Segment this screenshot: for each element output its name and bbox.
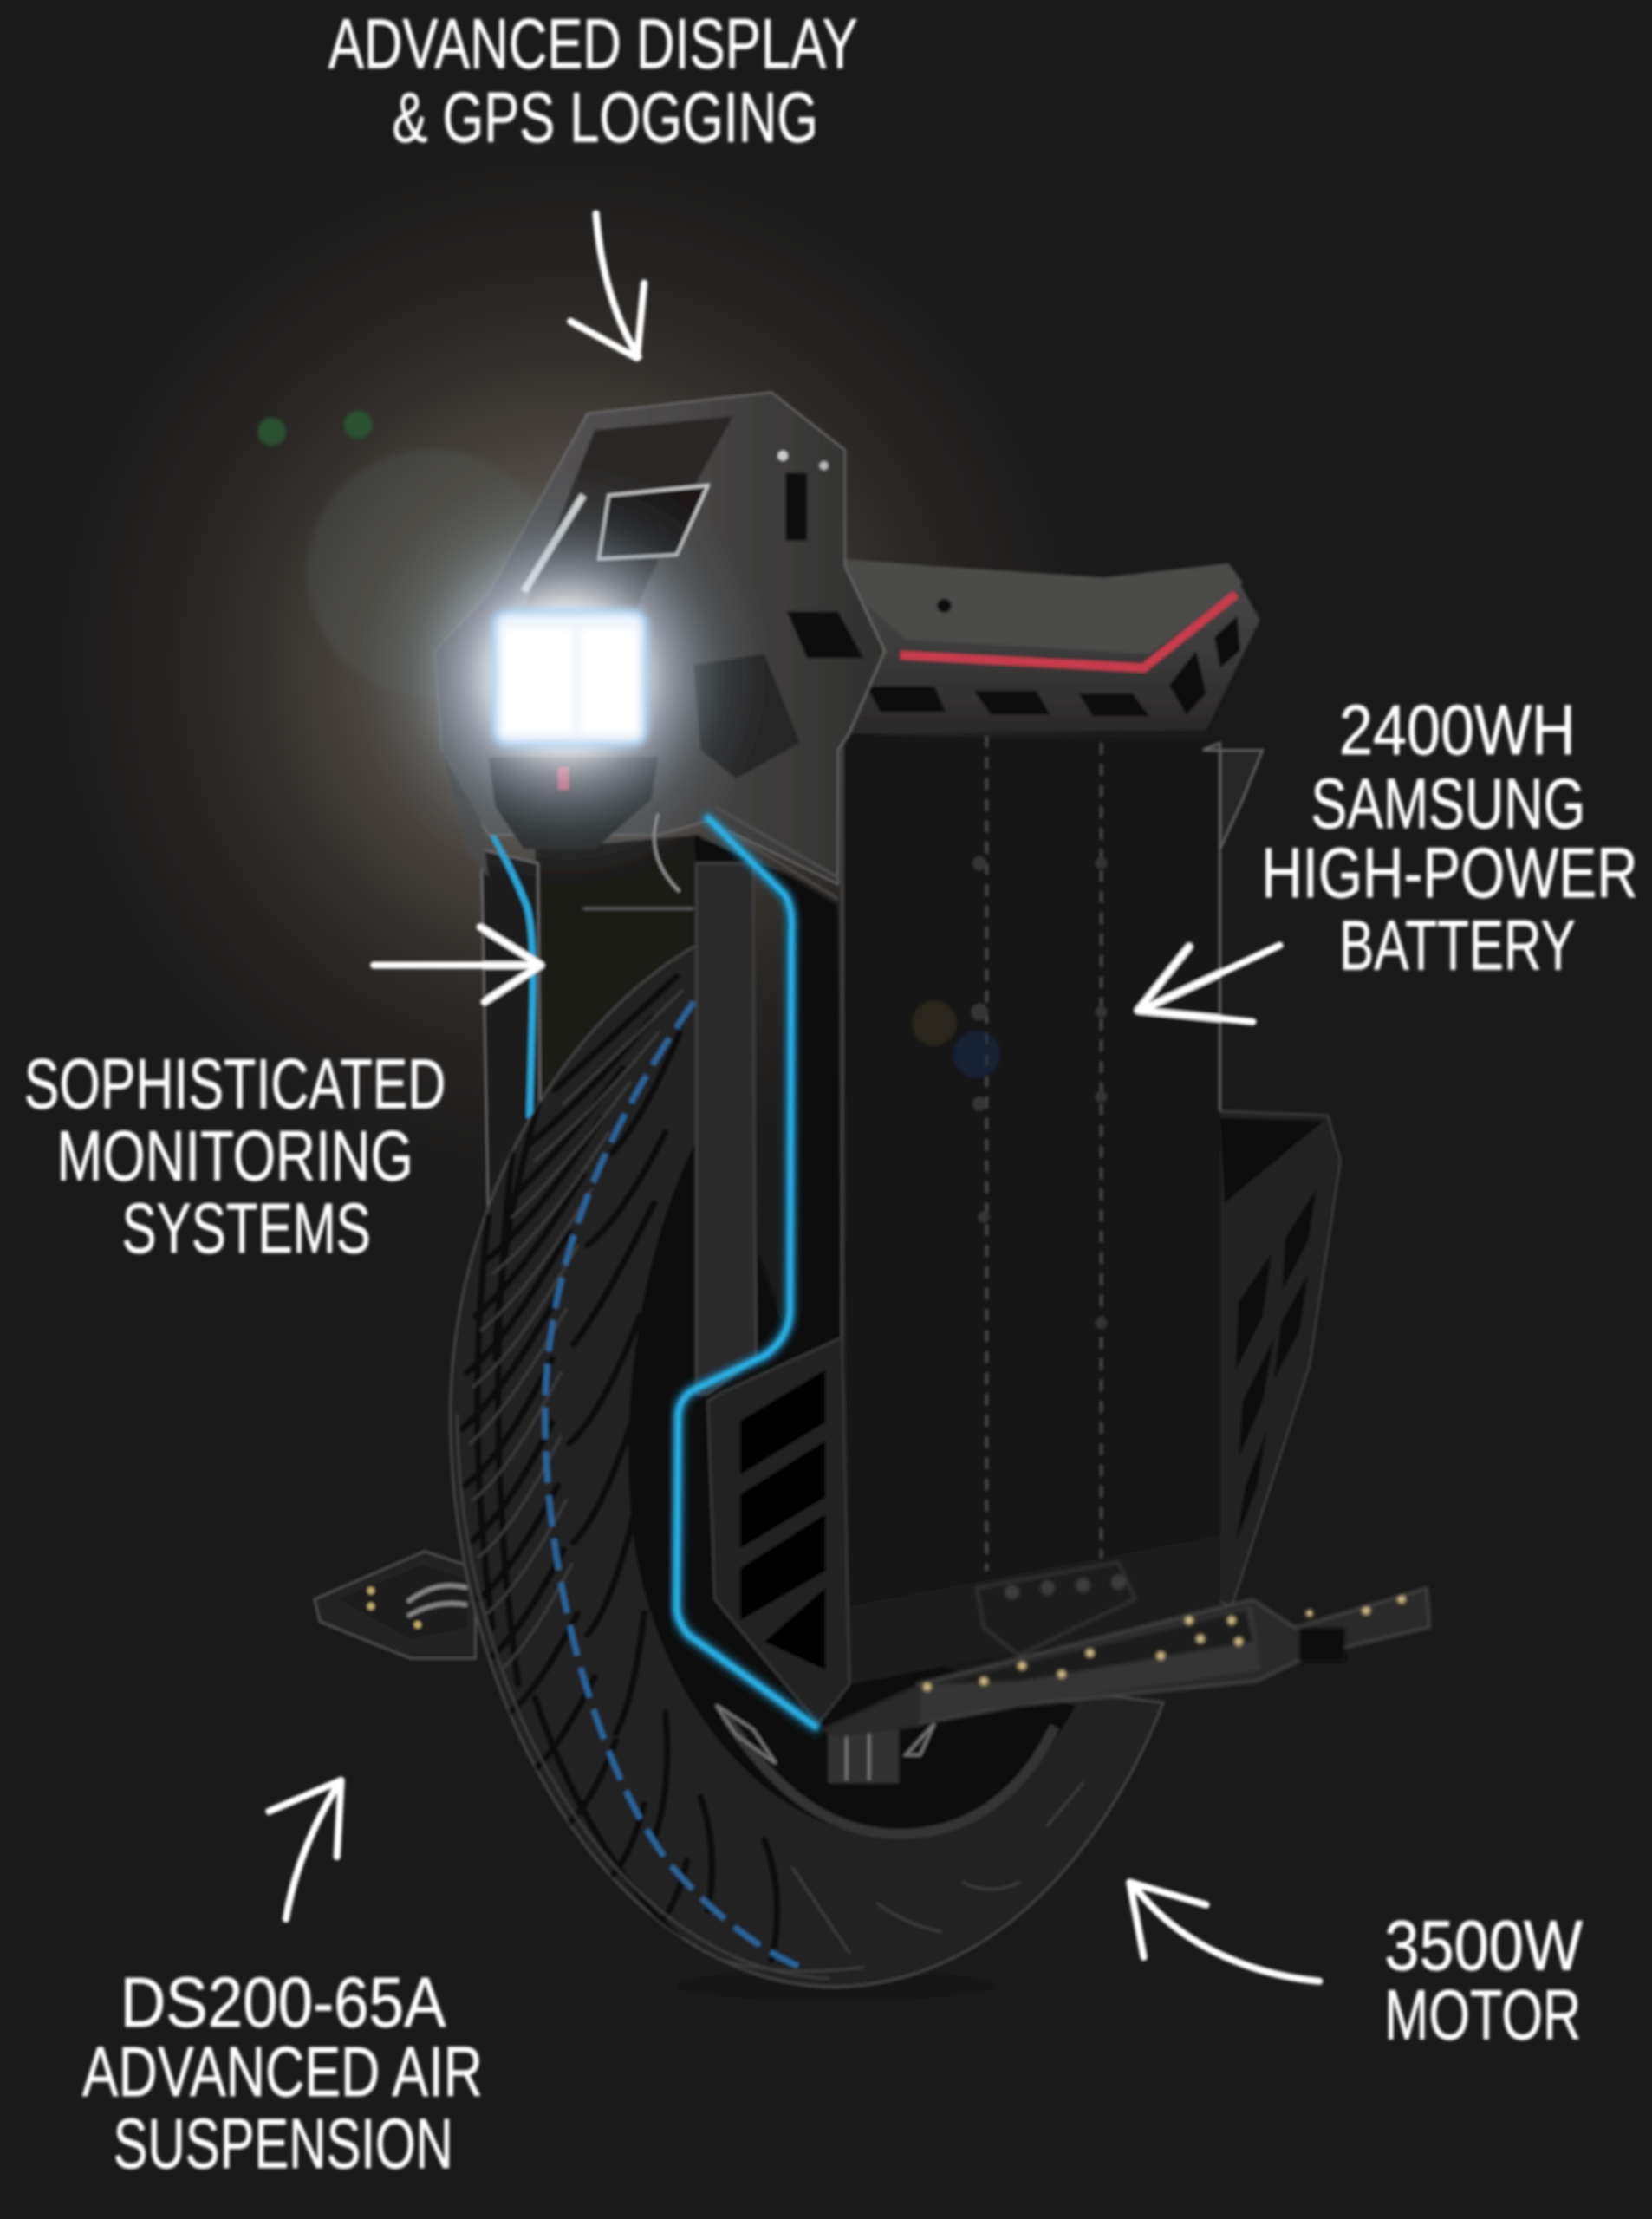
left pedal — [315, 1551, 476, 1658]
callout: battery: 2400WH — [1339, 691, 1576, 770]
faint teal halo ring — [307, 449, 556, 698]
arrow: to display — [570, 214, 644, 358]
callout: motor: 3500W — [1384, 1907, 1583, 1986]
head unit — [434, 392, 885, 908]
callout: battery — [1261, 691, 1638, 985]
centre column — [693, 835, 849, 1729]
right fin bracket — [1214, 1111, 1341, 1608]
headlight lamps — [494, 611, 646, 745]
callout: motor: MOTOR — [1384, 1976, 1581, 2055]
callout: advanced display: ADVANCED DISPLAY — [328, 4, 858, 83]
rear fork strut — [481, 828, 541, 1246]
right pedal — [821, 1562, 1430, 1738]
arrow: to monitoring — [374, 927, 541, 1002]
callout: motor — [1384, 1907, 1583, 2055]
callout: monitoring systems: SYSTEMS — [121, 1189, 371, 1268]
callout: battery: BATTERY — [1339, 906, 1576, 985]
background glow behind headlight — [0, 42, 1189, 1288]
blue light strip — [677, 818, 816, 1727]
dark gap behind fork — [535, 835, 700, 1132]
callout: air suspension: SUSPENSION — [114, 2105, 453, 2183]
tyre — [450, 946, 1164, 1987]
inner wheel rim — [628, 1118, 1076, 1837]
callout: monitoring systems: MONITORING — [56, 1117, 413, 1196]
arrow: to suspension — [269, 1780, 341, 1919]
lens flare spots — [257, 410, 1001, 1078]
ground shadow — [680, 1973, 991, 1998]
callout: air suspension: DS200-65A — [120, 1963, 446, 2042]
tread pattern — [458, 977, 1083, 1978]
red accent stripe — [901, 595, 1236, 668]
battery pack — [842, 733, 1263, 1684]
arrow: to battery — [1138, 946, 1279, 1022]
callout: monitoring systems — [24, 1044, 446, 1268]
callout: air suspension: ADVANCED AIR — [82, 2033, 483, 2112]
callout: monitoring systems: SOPHISTICATED — [24, 1044, 446, 1123]
headlight flare — [354, 465, 778, 888]
callout: air suspension — [82, 1963, 483, 2183]
arrow: to motor — [1129, 1882, 1319, 1981]
callout: advanced display: & GPS LOGGING — [392, 78, 818, 157]
callout: advanced display — [328, 4, 858, 157]
seat and top frame — [793, 559, 1260, 733]
blue sidewall stripe — [545, 1002, 807, 1970]
